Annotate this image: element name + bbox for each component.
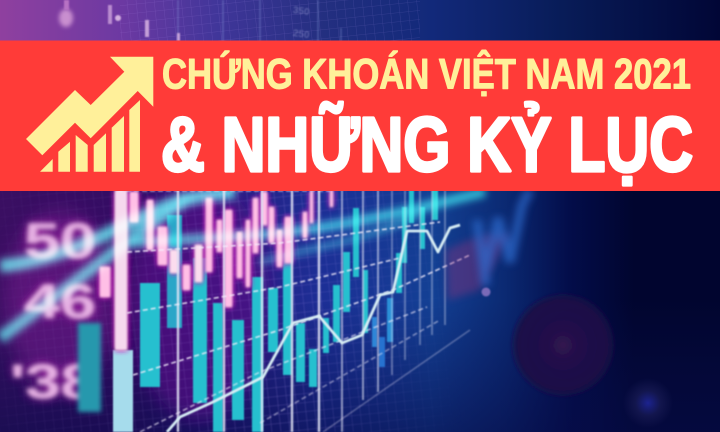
blurred axis numbers: 46 [24, 276, 96, 329]
lens flare: large [509, 291, 617, 399]
candlesticks: pink [100, 190, 333, 350]
banner: red title band [0, 40, 720, 191]
distant blurred chart at right [446, 190, 530, 300]
lens flare: small [623, 378, 673, 428]
upper chart strip: faint grid above the banner [59, 0, 420, 42]
upper chart strip: faint grid above the banner: 250 [292, 28, 311, 41]
blurred axis numbers [10, 213, 96, 409]
lattice grid [80, 191, 402, 432]
blurred axis numbers: 50 [24, 213, 96, 269]
dashed horizontal grid lines [118, 191, 470, 432]
line chart: white trend line [167, 225, 460, 432]
candlesticks: cyan [78, 190, 438, 432]
blurred axis numbers: '38 [10, 356, 96, 409]
icon: rising arrow with bars [26, 57, 153, 172]
glow bands: cyan trend streaks [0, 192, 485, 338]
vertical grid lines [178, 190, 445, 432]
upper chart strip: faint grid above the banner: 350 [292, 5, 311, 18]
